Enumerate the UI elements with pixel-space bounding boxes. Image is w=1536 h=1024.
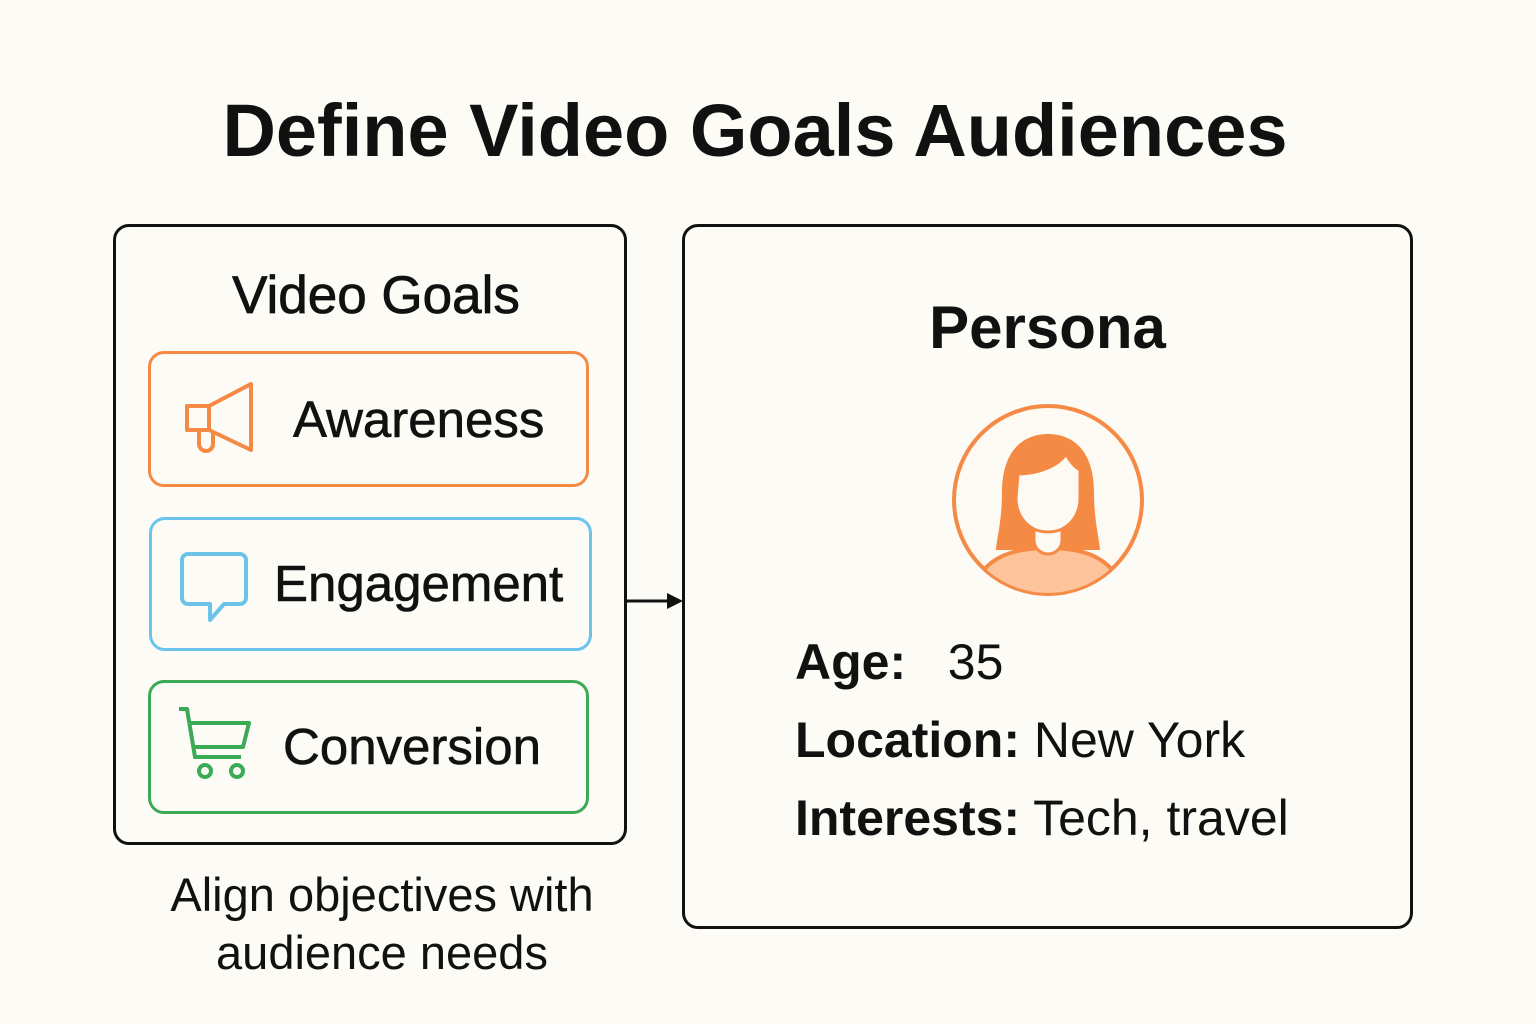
goal: awareness bbox=[148, 351, 589, 487]
persona details: Location: New York bbox=[795, 712, 1245, 768]
panel: video goals bbox=[113, 224, 627, 845]
title: Define Video Goals Audiences bbox=[222, 89, 1288, 172]
caption: audience needs bbox=[216, 926, 548, 979]
label: conversion: Conversion bbox=[283, 718, 541, 775]
label: awareness: Awareness bbox=[293, 391, 544, 448]
icon: megaphone bbox=[185, 382, 253, 453]
persona details: Age: 35 bbox=[795, 634, 1003, 690]
arrow bbox=[627, 593, 682, 609]
goal: engagement bbox=[149, 517, 592, 651]
heading: persona: Persona bbox=[929, 294, 1166, 361]
persona details bbox=[795, 634, 1289, 846]
panel: persona bbox=[682, 224, 1413, 929]
caption bbox=[170, 868, 594, 979]
icon: persona avatar bbox=[952, 404, 1144, 596]
goal: conversion bbox=[148, 680, 589, 814]
persona details: Interests: Tech, travel bbox=[795, 790, 1289, 846]
heading: video goals: Video Goals bbox=[232, 266, 520, 325]
caption: Align objectives with bbox=[170, 868, 594, 921]
label: engagement: Engagement bbox=[274, 555, 563, 612]
icon: shopping cart bbox=[179, 707, 251, 779]
icon: speech bubble bbox=[180, 552, 248, 622]
